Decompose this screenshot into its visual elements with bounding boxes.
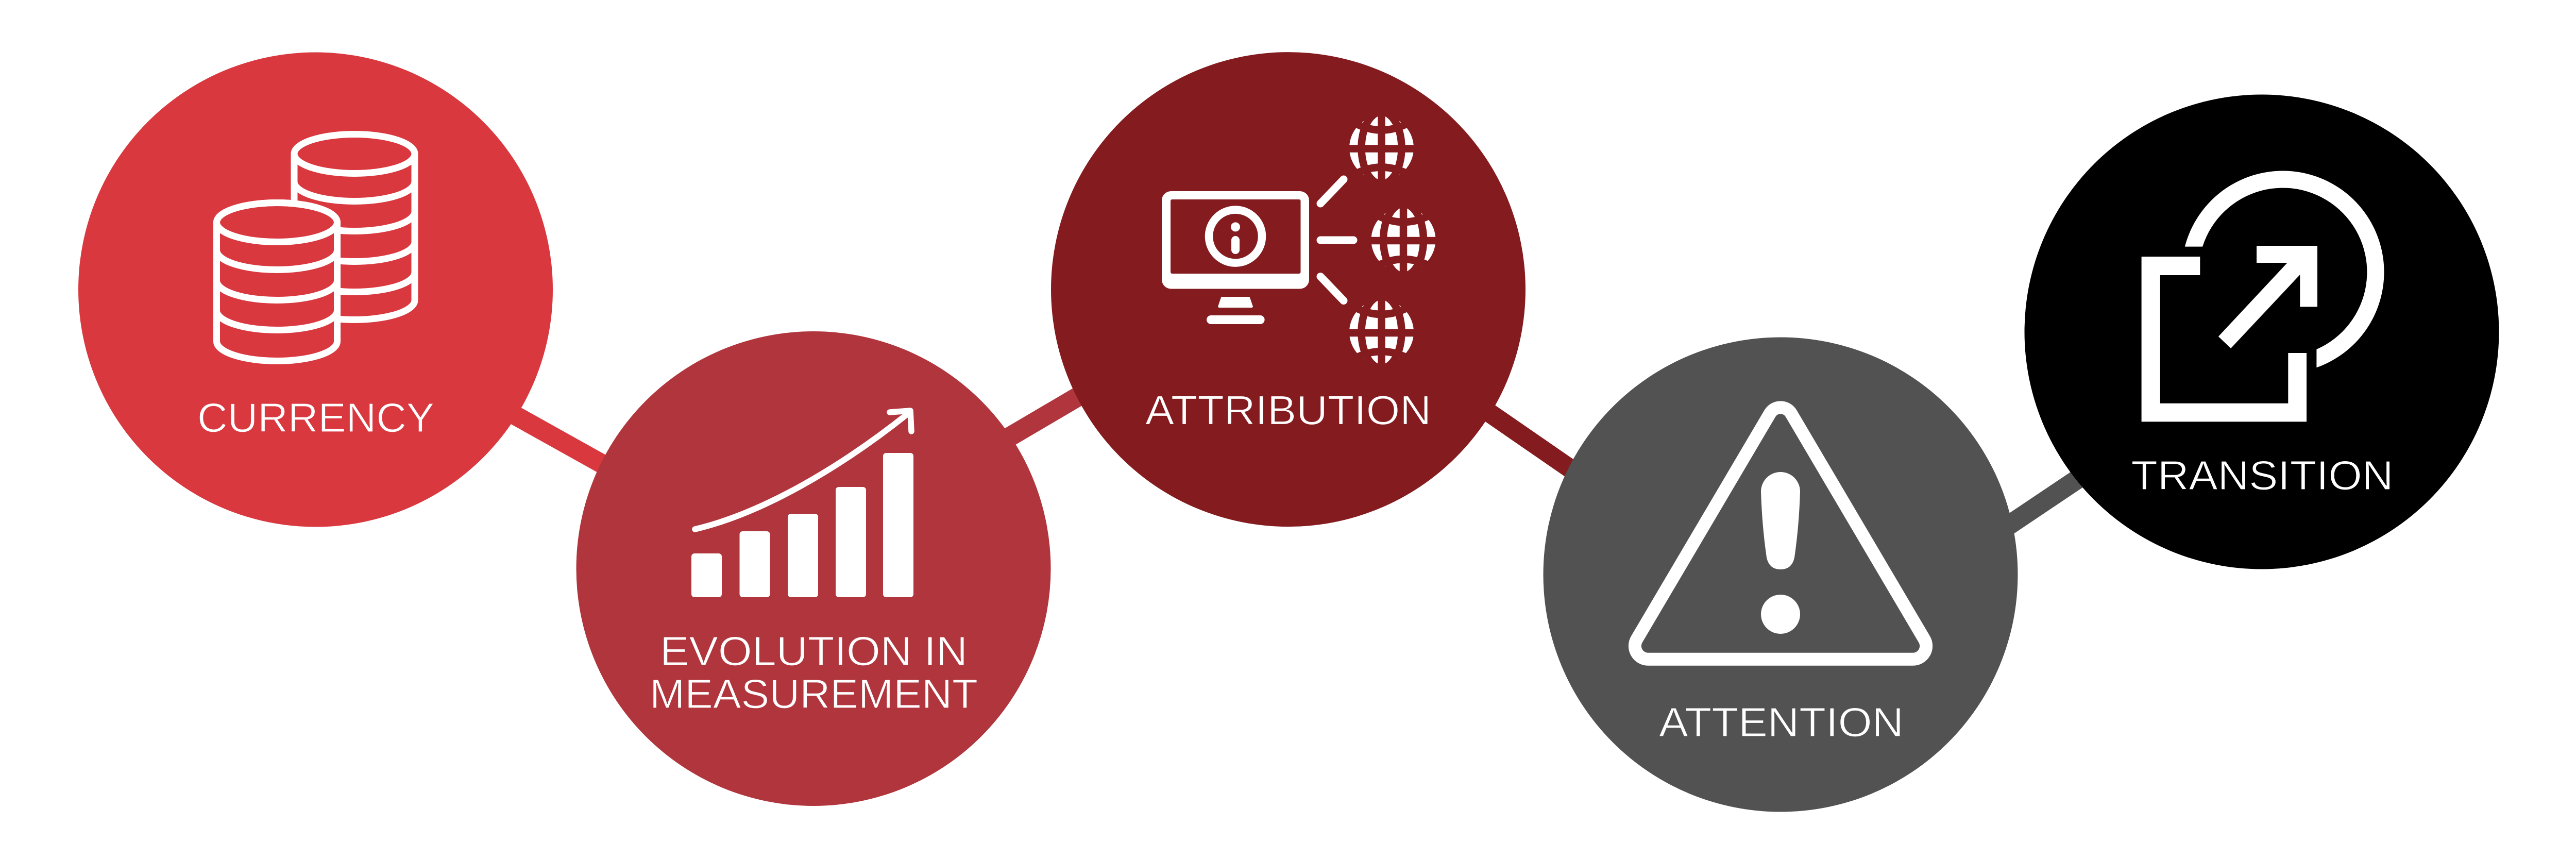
icon: coin stacks <box>216 134 415 361</box>
monitor <box>1162 191 1309 324</box>
panel: attention <box>1544 337 2018 812</box>
transition circle <box>2025 95 2499 569</box>
panel: transition <box>2025 95 2499 569</box>
label: attribution: ATTRIBUTION <box>1145 388 1431 433</box>
globe: middle <box>1367 204 1439 277</box>
back coin stack <box>294 134 415 319</box>
connector: attention to transition <box>1958 439 2138 560</box>
globe: top <box>1346 112 1418 184</box>
label: evolution in measurement: MEASUREMENT <box>650 671 978 717</box>
evolution circle <box>576 331 1051 806</box>
circular arc <box>2185 171 2384 367</box>
label: evolution in measurement <box>650 628 978 717</box>
currency circle <box>78 53 553 527</box>
front coin stack <box>216 203 337 361</box>
icon: transition arrow out of frame <box>2142 171 2384 422</box>
globe: bottom <box>1346 296 1418 369</box>
connector: evolution to attribution <box>979 379 1108 455</box>
panel: currency <box>78 53 553 527</box>
panel: evolution in measurement <box>576 331 1051 806</box>
attention circle <box>1544 337 2018 812</box>
label: currency: CURRENCY <box>197 395 434 441</box>
diagonal arrow <box>2218 246 2317 348</box>
label: evolution in measurement: EVOLUTION IN <box>660 628 968 674</box>
label: transition: TRANSITION <box>2131 452 2394 498</box>
label: attention: ATTENTION <box>1659 699 1904 745</box>
exclamation mark <box>1761 472 1800 569</box>
panel: attribution <box>1051 52 1526 527</box>
connector: currency to evolution <box>464 386 670 502</box>
triangle outline <box>1635 408 1926 659</box>
frame bracket <box>2142 257 2307 422</box>
icon: monitor connected to globes <box>1162 112 1439 369</box>
icon: growth bar chart <box>691 411 913 597</box>
attribution circle <box>1051 52 1526 527</box>
connection lines <box>1320 179 1353 301</box>
icon: warning triangle <box>1635 408 1926 659</box>
bars <box>691 453 913 597</box>
connector: attribution to attention <box>1443 380 1623 505</box>
rising arrow <box>695 411 911 529</box>
